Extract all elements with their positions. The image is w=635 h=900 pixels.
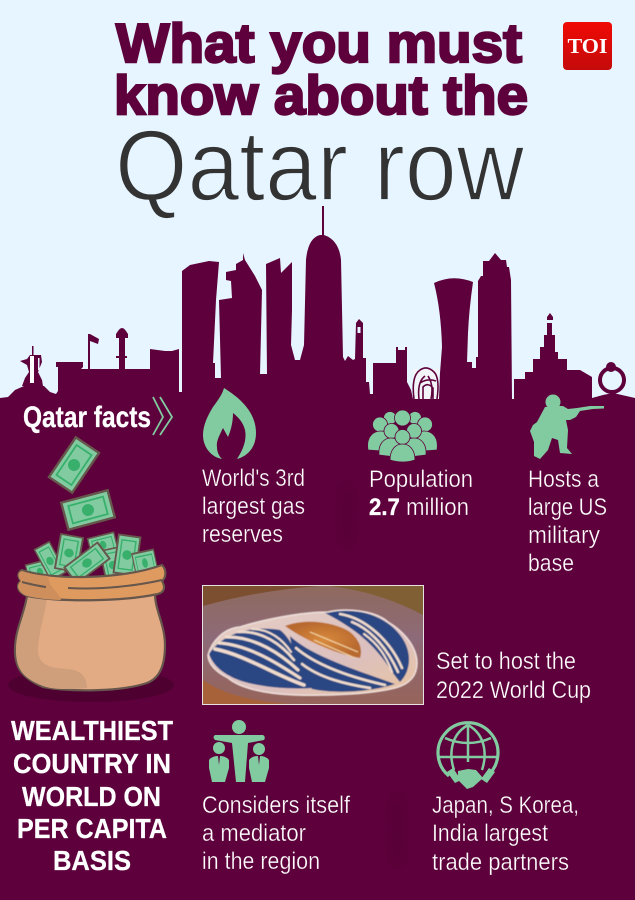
caption: World Cup: Set to host the	[436, 648, 576, 675]
title: Qatar row	[115, 110, 525, 222]
fountain monument	[413, 369, 439, 399]
caption: World Cup	[436, 648, 591, 704]
fact: US military base: Hosts a	[528, 466, 600, 493]
callout: wealthiest country	[11, 715, 173, 876]
bag shadow	[8, 668, 174, 702]
icon: soldier with rifle	[530, 394, 604, 459]
chevrons	[153, 397, 172, 435]
coffee pot monument	[20, 346, 43, 386]
pitch	[285, 622, 361, 658]
icon: globe with handshake	[438, 723, 498, 776]
TOI logo: TOI	[568, 34, 608, 58]
caption: World Cup: 2022 World Cup	[436, 677, 591, 704]
title	[114, 12, 528, 222]
fact: population: 2.7 million	[369, 494, 469, 521]
fact: population	[368, 410, 473, 521]
fact: gas reserves: largest gas	[202, 493, 305, 520]
fact: population: Population	[369, 466, 473, 493]
maroon ground and city skyline	[0, 206, 635, 900]
fact: gas reserves: reserves	[202, 521, 283, 548]
fact: US military base: base	[528, 550, 574, 577]
notes in bag	[25, 559, 55, 585]
fact: US military base: military	[528, 522, 600, 549]
bag body	[15, 594, 165, 690]
callout: wealthiest country: WORLD ON	[22, 781, 161, 812]
fact: mediator: Considers itself	[202, 792, 350, 819]
title: What you must	[116, 12, 522, 74]
title: know about the	[114, 64, 528, 126]
fact: trade partners: trade partners	[432, 849, 569, 876]
fact: mediator: a mediator	[202, 820, 306, 847]
TOI logo	[563, 22, 612, 70]
section heading: Qatar facts: Qatar facts	[23, 401, 151, 434]
right lobe	[325, 611, 409, 682]
stadium shell	[208, 610, 417, 695]
left lobe	[209, 629, 312, 688]
fact: trade partners: India largest	[432, 820, 548, 847]
callout: wealthiest country: BASIS	[53, 845, 131, 876]
fact: trade partners: Japan, S Korea,	[432, 792, 579, 819]
icon: mediator figures	[209, 720, 269, 782]
callout: wealthiest country: WEALTHIEST	[11, 715, 173, 746]
minaret top and window	[547, 313, 553, 320]
icon: money bag	[8, 437, 174, 702]
callout: wealthiest country: COUNTRY IN	[13, 748, 171, 779]
icon: flame	[203, 388, 256, 459]
fact: US military base	[528, 394, 607, 577]
middle lobe	[290, 636, 395, 692]
callout: wealthiest country: PER CAPITA	[17, 813, 167, 844]
faint shadows between columns	[344, 487, 400, 862]
fact: gas reserves: World's 3rd	[202, 465, 305, 492]
fact: mediator	[202, 720, 350, 875]
fact: trade partners	[432, 723, 579, 876]
falling notes	[49, 437, 99, 493]
bag rim	[18, 565, 165, 600]
ribs	[215, 614, 402, 688]
fact: mediator: in the region	[202, 848, 320, 875]
fact: gas reserves	[202, 388, 305, 548]
icon: crowd	[368, 410, 437, 462]
fact: US military base: large US	[528, 494, 607, 521]
stadium picture	[202, 585, 424, 705]
ring monument	[600, 368, 624, 392]
